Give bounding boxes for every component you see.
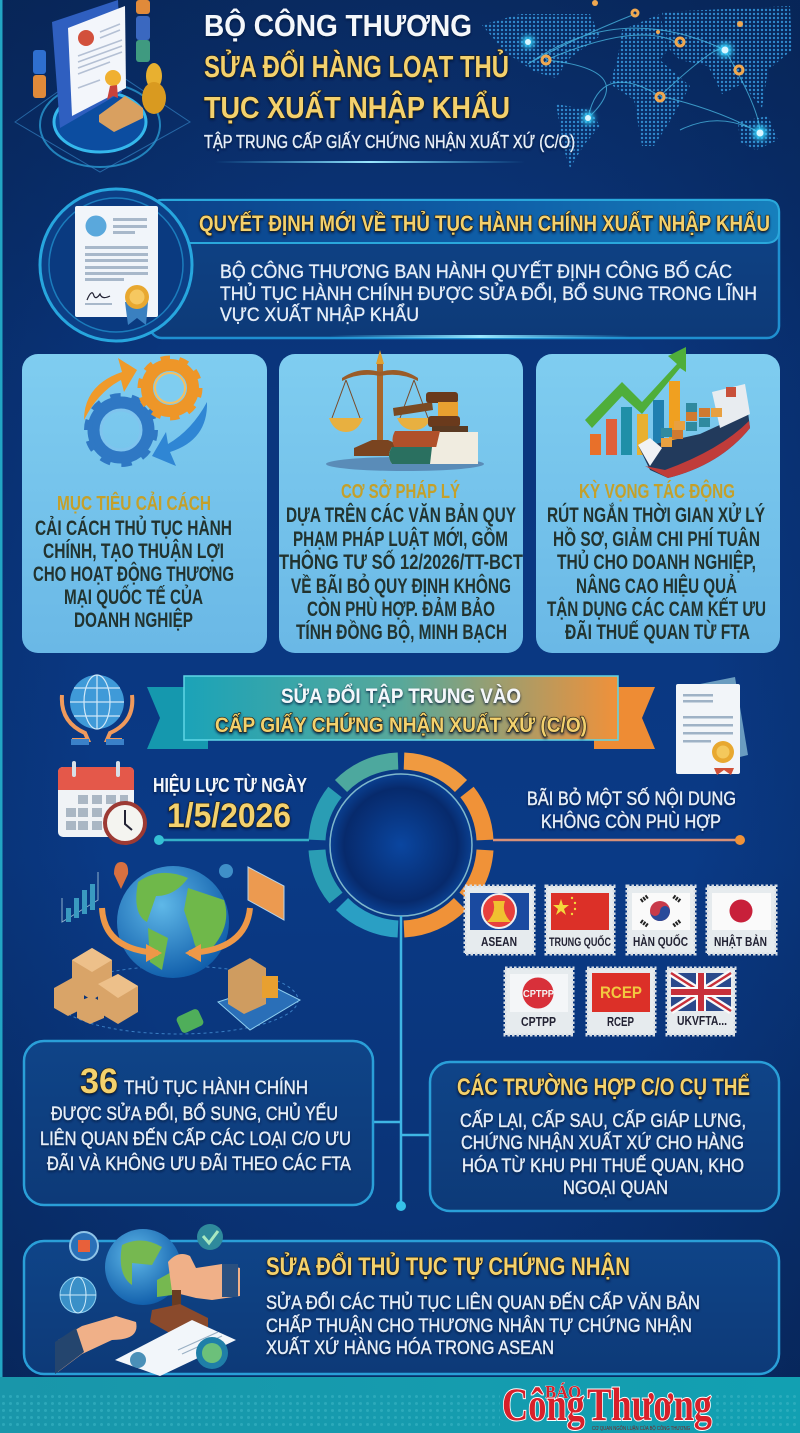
logo: Báo Công Thương: CƠ QUAN NGÔN LUẬN CỦA BỘ CÔNG THƯƠNG — [592, 1425, 690, 1432]
text: MẠI QUỐC TẾ CỦA — [64, 585, 203, 609]
text: CHỨNG NHẬN XUẤT XỨ CHO HÀNG — [461, 1132, 744, 1154]
heading: SỬA ĐỔI THỦ TỤC TỰ CHỨNG NHẬN — [266, 1251, 630, 1281]
text: effective date — [153, 773, 308, 835]
panel text: VỰC XUẤT NHẬP KHẨU — [220, 304, 419, 326]
panel: legal basis — [279, 350, 523, 653]
text: effective date: 1/5/2026 — [167, 797, 291, 835]
text: NÂNG CAO HIỆU QUẢ — [576, 574, 737, 598]
stamp: South Korea — [627, 886, 695, 954]
title: SỬA ĐỔI HÀNG LOẠT THỦ — [204, 48, 509, 84]
icon: scales, gavel and books — [326, 350, 484, 471]
stamp: Japan: NHẬT BẢN — [714, 934, 767, 949]
text — [547, 503, 766, 644]
panel: reform objective — [22, 354, 267, 653]
panel text — [220, 261, 757, 326]
text: NGOẠI QUAN — [563, 1178, 668, 1199]
stamp: CPTPP: CPTPP — [523, 989, 554, 1000]
central ring diagram — [317, 761, 485, 929]
heading: KỲ VỌNG TÁC ĐỘNG — [579, 479, 735, 503]
text — [460, 1110, 746, 1199]
stamp: South Korea: HÀN QUỐC — [633, 934, 688, 949]
text: XUẤT XỨ HÀNG HÓA TRONG ASEAN — [266, 1337, 554, 1359]
text: CÒN PHÙ HỢP. ĐẢM BẢO — [307, 597, 495, 621]
logo: Báo Công Thương: BÁO — [545, 1381, 581, 1402]
text: ĐƯỢC SỬA ĐỔI, BỔ SUNG, CHỦ YẾU — [51, 1103, 338, 1125]
text: SỬA ĐỔI CÁC THỦ TỤC LIÊN QUAN ĐẾN CẤP VĂN BẢN — [266, 1292, 700, 1314]
text: ĐÃI VÀ KHÔNG ƯU ĐÃI THEO CÁC FTA — [47, 1153, 351, 1175]
connector lines — [154, 835, 745, 1211]
text: THỦ TỤC HÀNH CHÍNH — [124, 1077, 308, 1099]
panel body — [150, 200, 779, 338]
ribbon banner — [147, 676, 655, 749]
text: PHẠM PHÁP LUẬT MỚI, GỒM — [293, 527, 508, 551]
big number: 36 — [80, 1062, 118, 1101]
icon: certificate document — [676, 677, 748, 775]
stamp: RCEP: RCEP — [600, 983, 642, 1002]
text: CHẤP THUẬN CHO THƯƠNG NHÂN TỰ CHỨNG NHẬN — [266, 1315, 692, 1337]
flag stamps — [465, 886, 776, 1035]
stamp: RCEP — [587, 968, 655, 1035]
panel: self-certification — [24, 1241, 779, 1374]
text: DOANH NGHIỆP — [74, 608, 193, 632]
panel text: THỦ TỤC HÀNH CHÍNH ĐƯỢC SỬA ĐỔI, BỔ SUNG TRONG LĨNH — [220, 283, 757, 305]
title — [204, 7, 575, 152]
panel: specific C/O cases — [430, 1062, 779, 1211]
text — [266, 1292, 700, 1359]
title: TỤC XUẤT NHẬP KHẨU — [204, 89, 510, 125]
stamp: CPTPP: CPTPP — [521, 1014, 556, 1029]
illustration: globe with cargo — [54, 862, 300, 1034]
panel: 36 procedures — [24, 1041, 373, 1205]
text: effective date: HIỆU LỰC TỪ NGÀY — [153, 773, 308, 797]
illustration: world network map — [482, 0, 792, 168]
stamp: China — [546, 886, 614, 954]
text: THÔNG TƯ SỐ 12/2026/TT-BCT — [279, 550, 523, 574]
text: repeal content: BÃI BỎ MỘT SỐ NỘI DUNG — [527, 788, 736, 810]
text: VỀ BÃI BỎ QUY ĐỊNH KHÔNG — [291, 574, 511, 598]
stamp: RCEP: RCEP — [607, 1014, 634, 1029]
icon: calendar with clock — [58, 761, 145, 843]
ribbon banner: CẤP GIẤY CHỨNG NHẬN XUẤT XỨ (C/O) — [215, 713, 587, 737]
panel header band — [150, 200, 779, 243]
title: TẬP TRUNG CẤP GIẤY CHỨNG NHẬN XUẤT XỨ (C/O) — [204, 131, 575, 152]
heading: CƠ SỞ PHÁP LÝ — [341, 479, 460, 503]
logo: Báo Công Thương: Công Thương — [502, 1379, 712, 1431]
panel text: BỘ CÔNG THƯƠNG BAN HÀNH QUYẾT ĐỊNH CÔNG BỐ CÁC — [220, 261, 732, 283]
stamp: UKVFTA — [667, 968, 735, 1035]
ribbon banner: SỬA ĐỔI TẬP TRUNG VÀO — [281, 684, 521, 708]
text — [279, 503, 523, 644]
panel: expected impact — [536, 347, 780, 653]
text: CHO HOẠT ĐỘNG THƯƠNG — [33, 562, 234, 586]
heading: MỤC TIÊU CẢI CÁCH — [57, 491, 211, 515]
footer band — [0, 1377, 800, 1433]
text — [33, 516, 234, 632]
text: TÍNH ĐỒNG BỘ, MINH BẠCH — [296, 620, 507, 644]
icon: gears and arrows — [84, 358, 207, 466]
title: BỘ CÔNG THƯƠNG — [204, 7, 472, 43]
icon: growth chart and cargo ship — [585, 347, 750, 478]
stamp: Japan — [707, 886, 776, 954]
stamp: ASEAN — [465, 886, 534, 954]
stamp: CPTPP — [505, 968, 573, 1035]
text: CẤP LẠI, CẤP SAU, CẤP GIÁP LƯNG, — [460, 1110, 746, 1132]
text — [40, 1077, 351, 1175]
stamp: ASEAN: ASEAN — [481, 934, 517, 949]
icon: globe in hands — [62, 675, 132, 745]
text: repeal content: KHÔNG CÒN PHÙ HỢP — [541, 811, 721, 833]
text: LIÊN QUAN ĐẾN CẤP CÁC LOẠI C/O ƯU — [40, 1128, 351, 1150]
text: CHÍNH, TẠO THUẬN LỢI — [43, 539, 224, 563]
text: DỰA TRÊN CÁC VĂN BẢN QUY — [286, 503, 516, 527]
text: CẢI CÁCH THỦ TỤC HÀNH — [35, 516, 232, 540]
text: HÓA TỪ KHU PHI THUẾ QUAN, KHO — [462, 1155, 744, 1177]
icon: certificate in circle — [40, 189, 192, 341]
text: repeal content — [527, 788, 736, 833]
stamp: China: TRUNG QUỐC — [549, 934, 611, 949]
illustration: stamp and handshake — [55, 1224, 240, 1376]
stamp: UKVFTA: UKVFTA... — [677, 1013, 727, 1028]
panel: new decision — [150, 200, 779, 338]
illustration: document on digital platform — [15, 0, 190, 172]
